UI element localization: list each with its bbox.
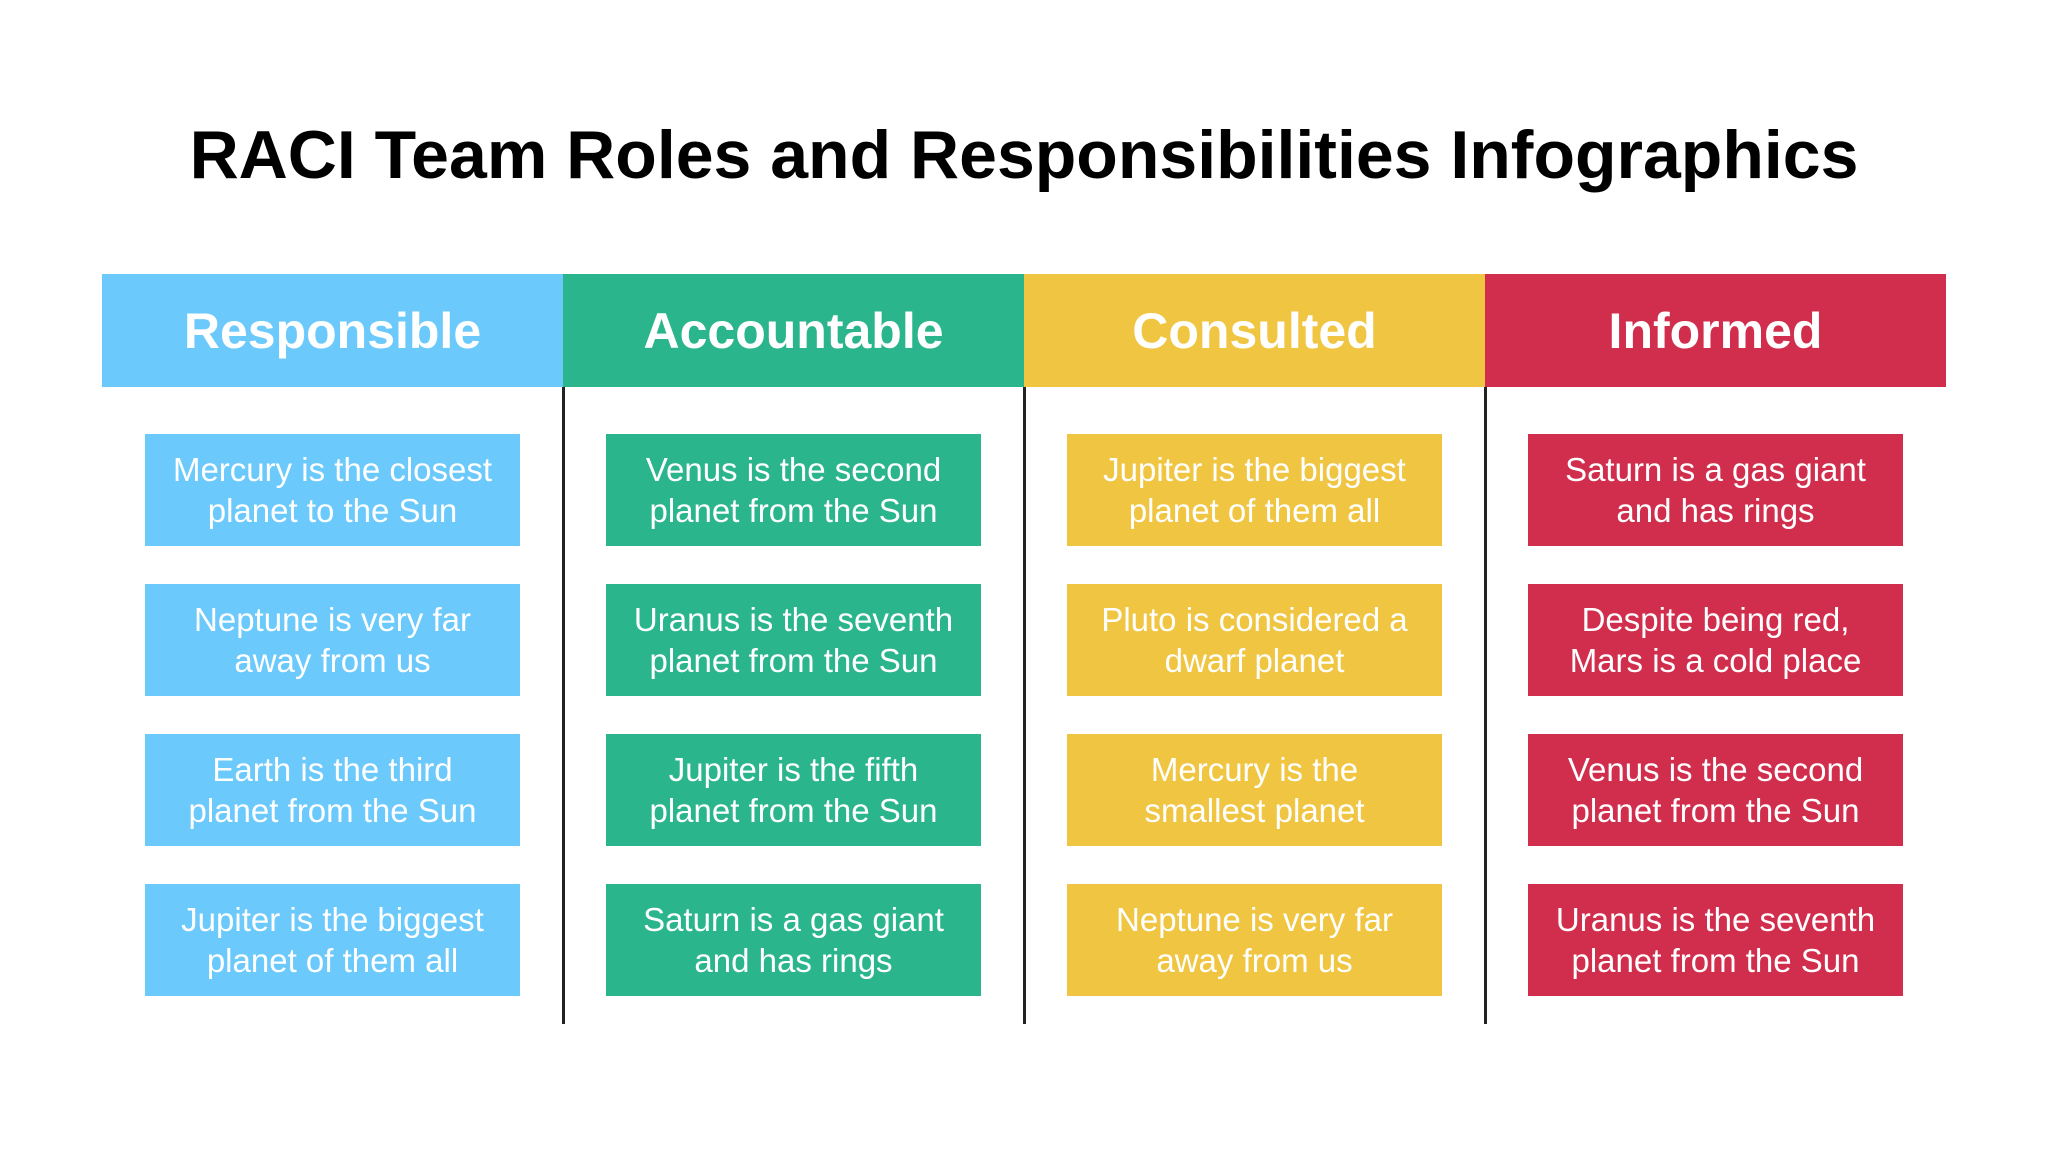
- box I2: [1528, 584, 1903, 696]
- box A1: [606, 434, 981, 546]
- box C1: Jupiter is the biggest: [1103, 451, 1406, 488]
- header: Informed: Informed: [1609, 302, 1822, 358]
- box C4: away from us: [1156, 942, 1353, 979]
- box R4: [145, 884, 520, 996]
- box R4: planet of them all: [207, 942, 458, 979]
- header: Consulted: Consulted: [1132, 302, 1377, 358]
- box C3: smallest planet: [1144, 792, 1365, 829]
- box I4: planet from the Sun: [1571, 942, 1860, 979]
- box R1: Mercury is the closest: [173, 451, 492, 488]
- box C4: Neptune is very far: [1116, 901, 1393, 938]
- box C3: [1067, 734, 1442, 846]
- panel: consulted boxes: [1067, 434, 1442, 996]
- box A1: Venus is the second: [646, 451, 941, 488]
- box I4: Uranus is the seventh: [1556, 901, 1875, 938]
- box I2: Mars is a cold place: [1570, 642, 1861, 679]
- box A3: planet from the Sun: [649, 792, 938, 829]
- header: Consulted: [1024, 274, 1485, 387]
- box A4: Saturn is a gas giant: [643, 901, 944, 938]
- box A4: and has rings: [694, 942, 893, 979]
- box C1: planet of them all: [1129, 492, 1380, 529]
- box C2: dwarf planet: [1165, 642, 1344, 679]
- panel: responsible boxes: [145, 434, 520, 996]
- box I2: Despite being red,: [1582, 601, 1849, 638]
- header: Responsible: Responsible: [184, 302, 481, 358]
- box A2: Uranus is the seventh: [634, 601, 953, 638]
- box R4: Jupiter is the biggest: [181, 901, 484, 938]
- box C3: Mercury is the: [1151, 751, 1358, 788]
- panel: accountable boxes: [606, 434, 981, 996]
- box C2: Pluto is considered a: [1101, 601, 1408, 638]
- box C4: [1067, 884, 1442, 996]
- header: Responsible: [102, 274, 563, 387]
- box A2: planet from the Sun: [649, 642, 938, 679]
- box I3: planet from the Sun: [1571, 792, 1860, 829]
- box A3: [606, 734, 981, 846]
- box A4: [606, 884, 981, 996]
- box R2: Neptune is very far: [194, 601, 471, 638]
- box R1: planet to the Sun: [208, 492, 457, 529]
- box I1: [1528, 434, 1903, 546]
- box A1: planet from the Sun: [649, 492, 938, 529]
- header: Accountable: Accountable: [643, 302, 944, 358]
- box R2: away from us: [234, 642, 431, 679]
- box R1: [145, 434, 520, 546]
- box C2: [1067, 584, 1442, 696]
- box R3: planet from the Sun: [188, 792, 476, 829]
- box I3: Venus is the second: [1568, 751, 1863, 788]
- title: RACI Team Roles and Responsibilities Infographics: [190, 117, 1858, 193]
- box I3: [1528, 734, 1903, 846]
- box A3: Jupiter is the fifth: [669, 751, 918, 788]
- box C1: [1067, 434, 1442, 546]
- box R3: [145, 734, 520, 846]
- header: Informed: [1485, 274, 1946, 387]
- box I4: [1528, 884, 1903, 996]
- box A2: [606, 584, 981, 696]
- box I1: Saturn is a gas giant: [1565, 451, 1866, 488]
- header: Accountable: [563, 274, 1024, 387]
- box R2: [145, 584, 520, 696]
- panel: informed boxes: [1528, 434, 1903, 996]
- box R3: Earth is the third: [212, 751, 453, 788]
- box I1: and has rings: [1616, 492, 1815, 529]
